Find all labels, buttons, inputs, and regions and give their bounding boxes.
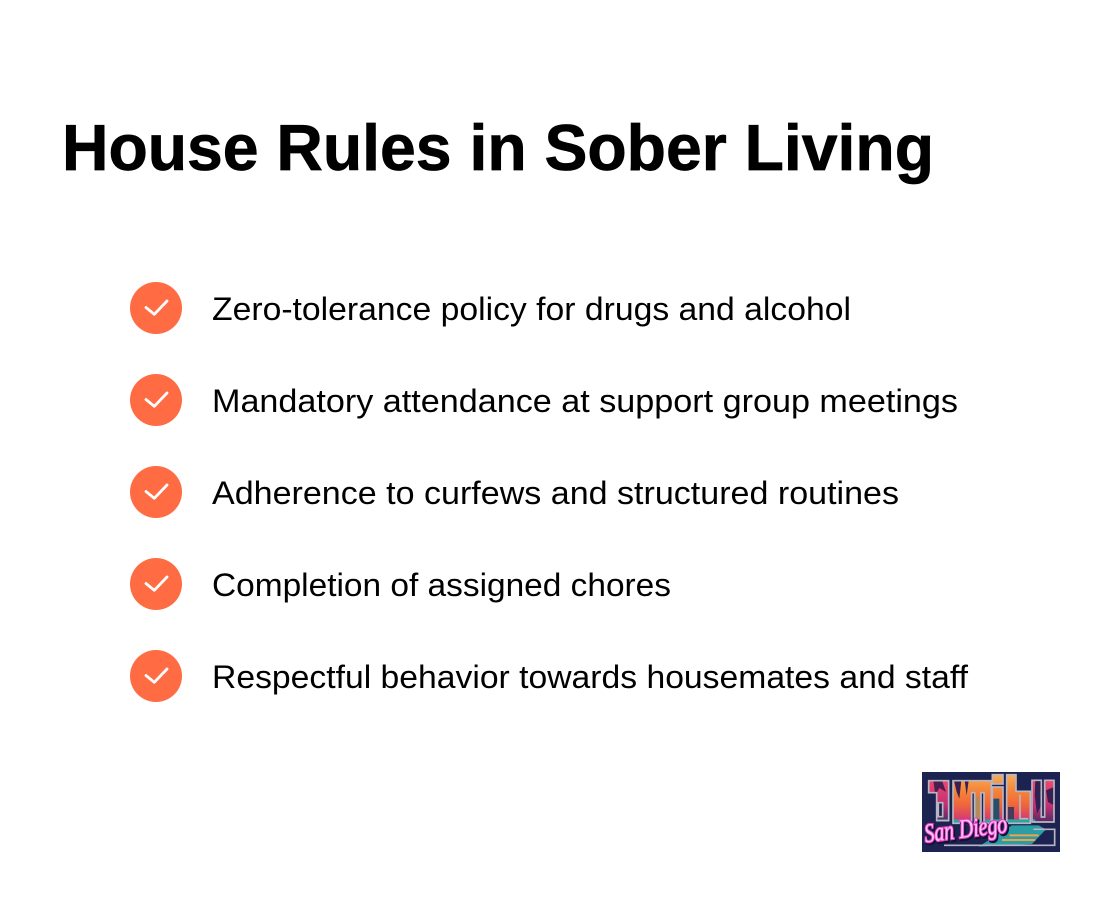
rule 2 [130, 374, 958, 426]
logo script text: San Diego [922, 808, 1009, 848]
rule 1 [130, 282, 851, 334]
city scene inside letters [930, 776, 1054, 822]
logo: Amity San Diego [922, 772, 1060, 852]
rule 5: Respectful behavior towards housemates and staff [212, 659, 969, 695]
rule 4: Completion of assigned chores [212, 567, 671, 603]
rule 4 [130, 558, 671, 610]
title: House Rules in Sober Living [62, 111, 934, 184]
letter outlines [929, 775, 1054, 824]
rule 3: Adherence to curfews and structured routines [212, 475, 899, 511]
beach and outer frame [944, 825, 1055, 847]
rule 3 [130, 466, 899, 518]
rule 5 [130, 650, 969, 702]
rule 2: Mandatory attendance at support group meetings [212, 383, 958, 419]
rule 1: Zero-tolerance policy for drugs and alcohol [212, 291, 851, 327]
checklist [130, 282, 969, 702]
logo script text shadow: San Diego [924, 810, 1010, 850]
